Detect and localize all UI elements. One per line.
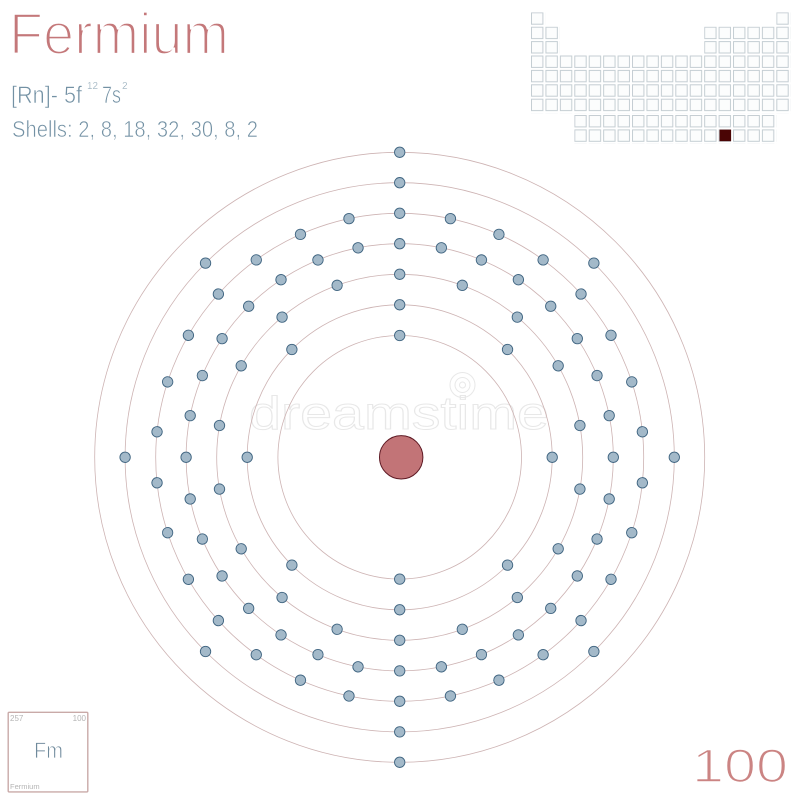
- shell 3: 18 electrons: [213, 269, 586, 646]
- shell 1: 2 electrons: [278, 330, 522, 584]
- shells list: Shells: 2, 8, 18, 32, 30, 8, 2: [12, 116, 258, 142]
- element symbol card: [8, 712, 88, 792]
- watermark: dreamstime: [249, 387, 549, 439]
- electron configuration: 7s: [102, 82, 121, 109]
- electron configuration: 2: [122, 81, 128, 92]
- periodic table locator: [531, 12, 791, 144]
- atom diagram: [95, 147, 705, 768]
- shell 6: 8 electrons: [120, 178, 680, 737]
- symbol: Fm: [34, 738, 63, 763]
- atomic mass: 257: [10, 714, 24, 723]
- electron configuration: [11, 81, 128, 109]
- atomic number: 100: [73, 714, 87, 723]
- highlighted element cell: fermium: [720, 130, 731, 141]
- atomic number large: 100: [692, 739, 788, 792]
- electron configuration: [Rn]-: [11, 82, 58, 109]
- nucleus: [380, 436, 423, 479]
- element name: Fermium: [10, 782, 40, 791]
- watermark: [249, 372, 549, 439]
- shell 2: 8 electrons: [242, 300, 557, 615]
- title: Fermium: [9, 2, 229, 67]
- electron configuration: 5f: [64, 82, 82, 109]
- shell 4: 32 electrons: [181, 238, 618, 676]
- electron configuration: 12: [87, 81, 99, 92]
- shell 7: 2 electrons: [95, 147, 705, 768]
- shell 5: 30 electrons: [151, 208, 648, 706]
